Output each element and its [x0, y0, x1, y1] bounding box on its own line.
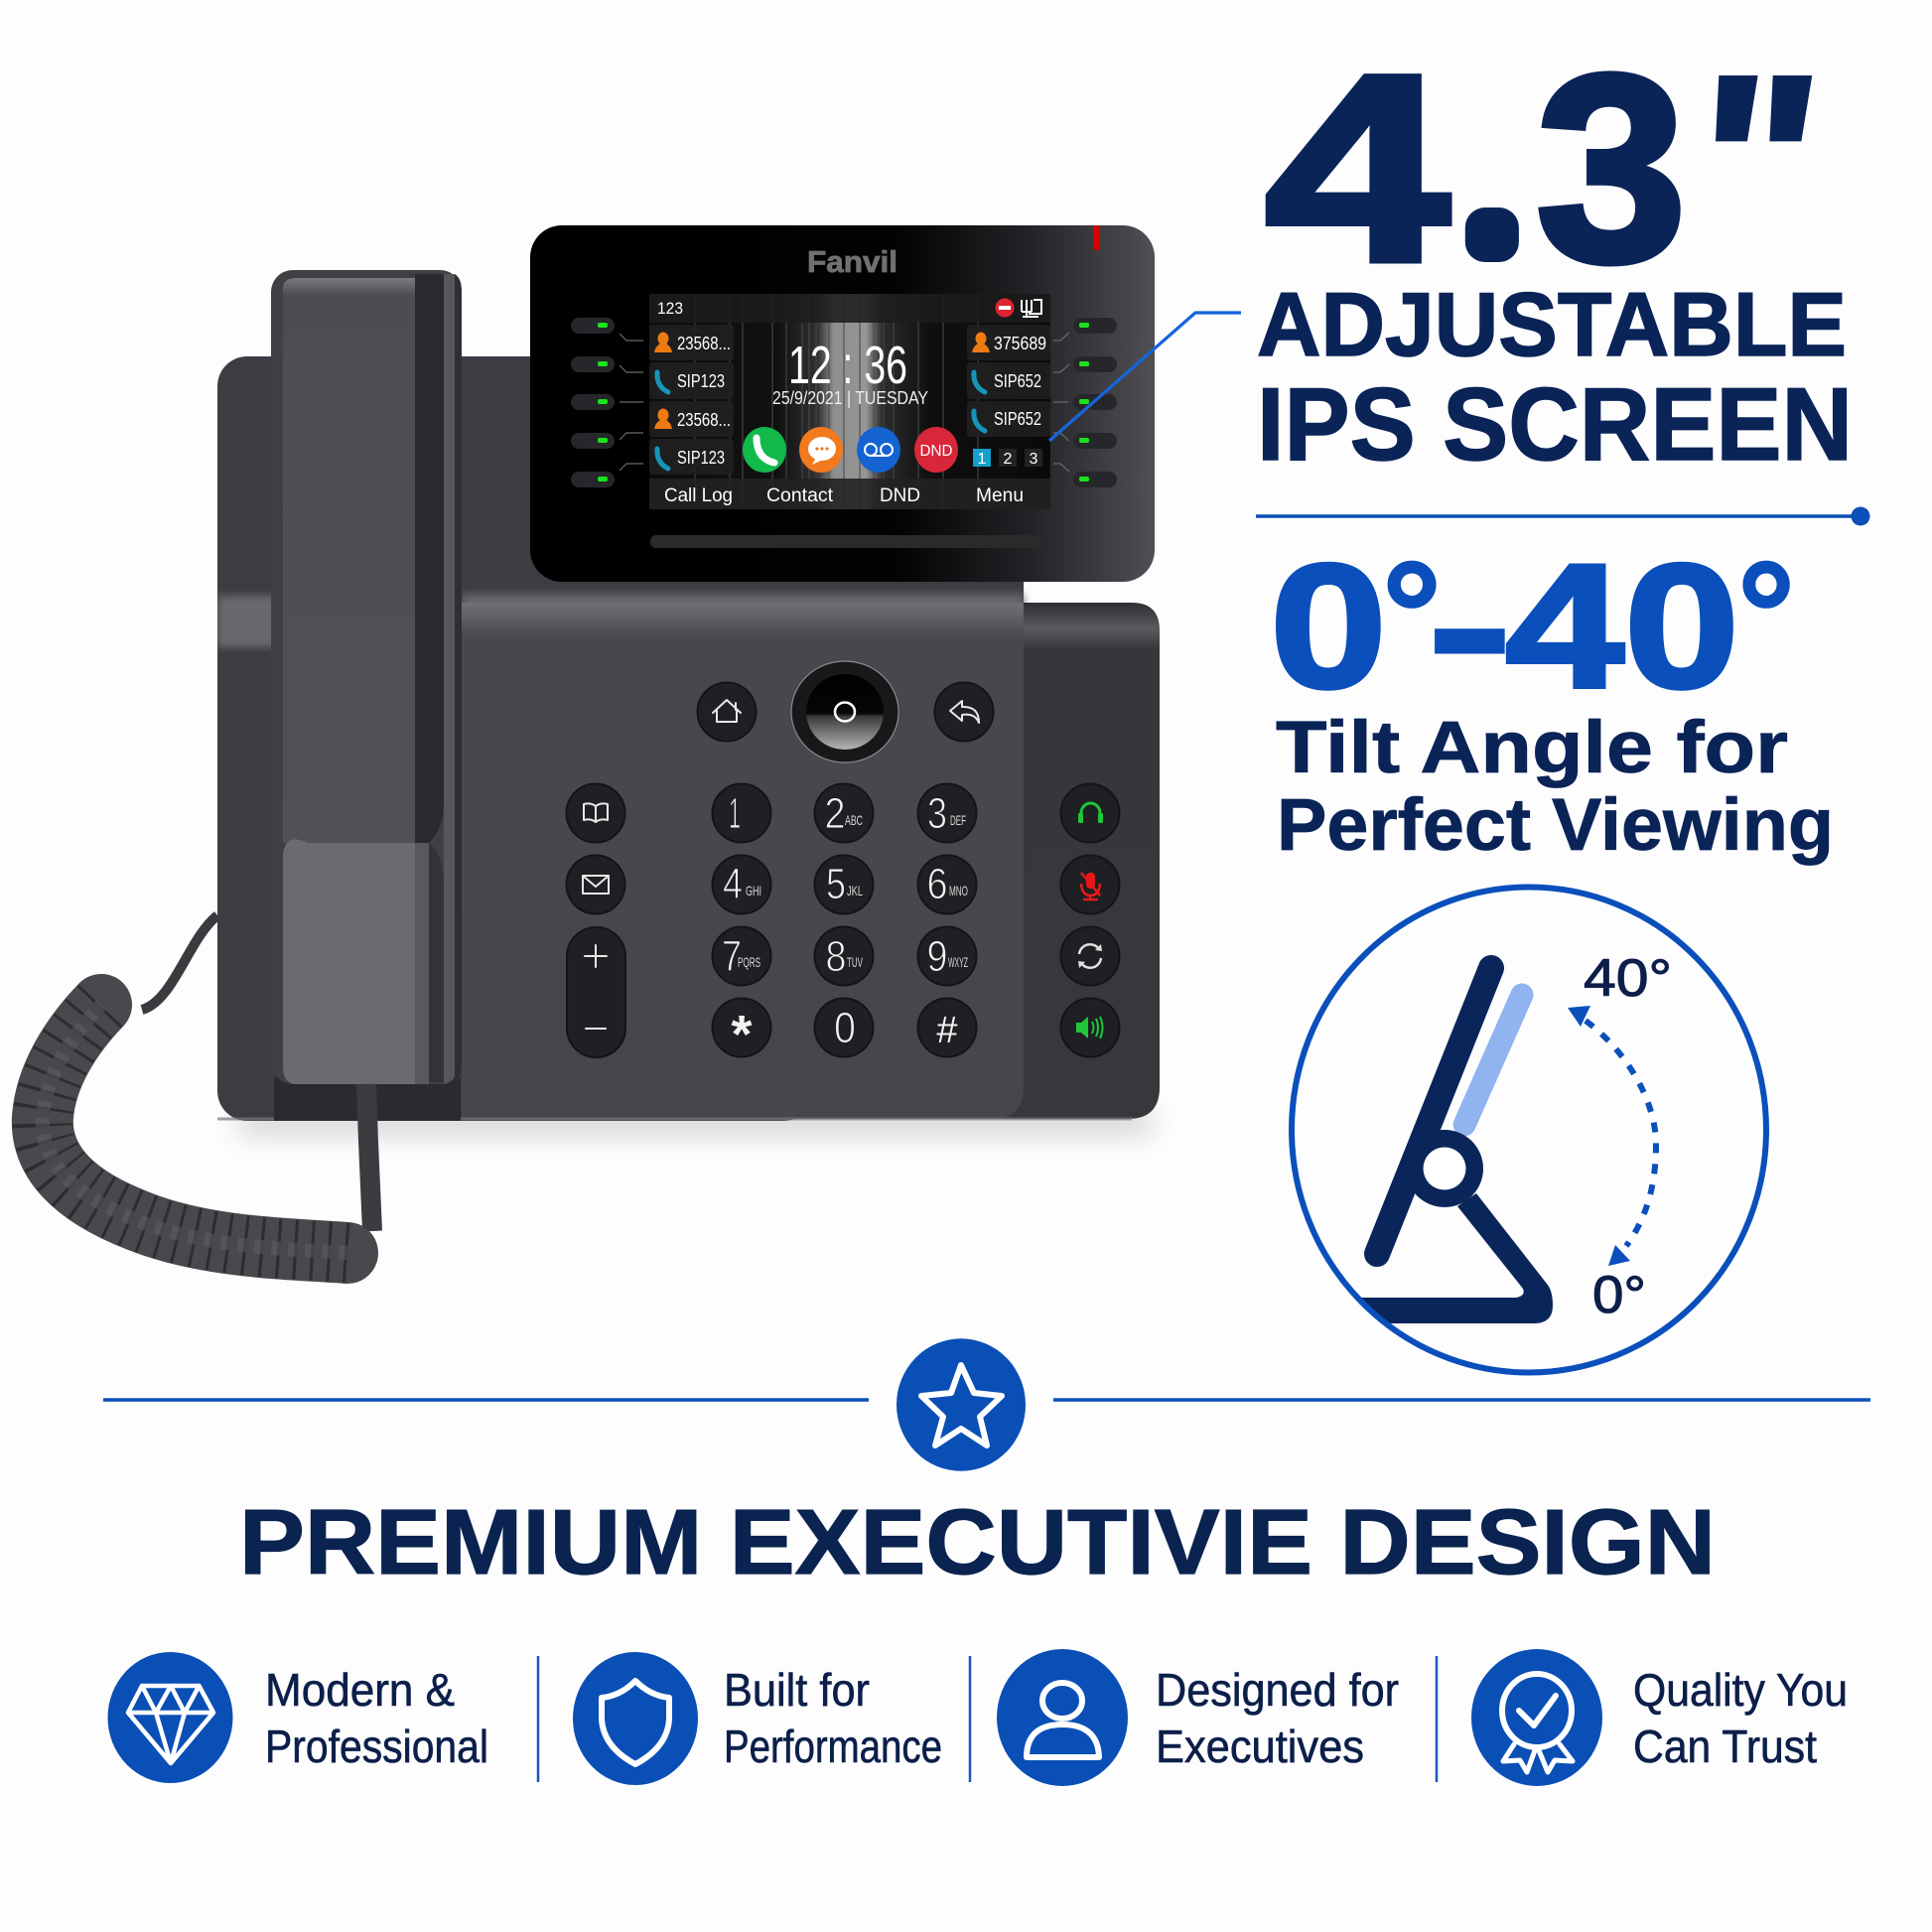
feature: designed for executives — [997, 1649, 1399, 1786]
joystick — [791, 661, 898, 762]
right contact keys: SIP652 — [994, 371, 1041, 391]
tilt caption: Tilt Angle for — [1276, 706, 1788, 788]
message key — [566, 856, 625, 913]
network status icon — [1022, 300, 1041, 318]
dial pad: 8 — [826, 932, 846, 981]
back key — [935, 683, 993, 741]
divider with dot — [1256, 506, 1870, 526]
tilted display unit — [530, 225, 1155, 582]
icon: star badge — [897, 1338, 1026, 1471]
outer ring — [1292, 888, 1766, 1372]
text — [1156, 1664, 1399, 1772]
section divider right — [1053, 1398, 1870, 1402]
text: Designed for — [1156, 1664, 1399, 1716]
dial pad: 9 — [927, 932, 947, 981]
handset cord — [366, 1084, 372, 1231]
hinge — [1406, 1130, 1483, 1207]
dial pad: # — [936, 1010, 958, 1051]
floor shadow — [238, 1110, 1152, 1134]
stand base — [1340, 1193, 1553, 1323]
dial pad: 3 — [927, 789, 947, 838]
headset key — [1060, 784, 1120, 842]
navigation keys — [697, 661, 993, 762]
transfer key — [1060, 927, 1120, 985]
tilt range value: ° — [1382, 530, 1442, 697]
text: Professional — [265, 1721, 488, 1772]
dial pad: TUV — [847, 954, 863, 970]
tilt range value: 0 — [1270, 527, 1387, 725]
arrowhead top — [1568, 1006, 1590, 1027]
section heading: PREMIUM EXECUTIVIE DESIGN — [239, 1490, 1716, 1593]
thin line cord to base — [142, 915, 217, 1010]
headline: adjustable: ADJUSTABLE — [1257, 275, 1847, 375]
headline: 4.3 inch: . — [1478, 153, 1506, 264]
page selector — [973, 449, 1042, 468]
text: Quality You — [1633, 1664, 1848, 1716]
tilt range value: 4 — [1505, 527, 1624, 725]
text: Executives — [1156, 1721, 1364, 1772]
left contact keys: SIP123 — [677, 448, 725, 468]
soft key bar: Contact — [766, 485, 834, 506]
handset — [271, 270, 462, 1084]
section divider left — [103, 1398, 869, 1402]
text — [1633, 1664, 1848, 1772]
app: voicemail — [857, 427, 900, 473]
soft key bar: Call Log — [664, 485, 733, 506]
date: 25/9/2021 | TUESDAY — [772, 388, 928, 408]
text: Performance — [724, 1721, 942, 1772]
home key — [697, 683, 757, 741]
dial pad: MNO — [949, 883, 968, 898]
tilt range value: ° — [1737, 530, 1795, 697]
icon: award ribbon — [1471, 1649, 1602, 1786]
left function keys — [566, 784, 625, 1057]
left contact keys: SIP123 — [677, 371, 725, 391]
icon: diamond — [107, 1652, 232, 1783]
app: DND — [914, 427, 958, 473]
phone base body — [217, 356, 1024, 1121]
page selector: 2 — [1004, 451, 1013, 468]
speaker key — [1060, 999, 1120, 1056]
text: Modern & — [265, 1664, 455, 1716]
label 0 degrees: 0° — [1592, 1266, 1646, 1324]
app: phone — [743, 427, 786, 473]
tilt caption: Perfect Viewing — [1277, 783, 1834, 866]
dashed motion arc — [1586, 1021, 1656, 1246]
right contact keys: SIP652 — [994, 409, 1041, 429]
dial pad: * — [731, 1005, 753, 1064]
dial pad: ABC — [845, 812, 863, 828]
dial pad: 1 — [729, 789, 741, 838]
headline: 4.3 inch: " — [1680, 25, 1833, 302]
brand logo: Fanvil — [807, 244, 897, 279]
arrowhead bottom — [1608, 1245, 1630, 1266]
tilted dark screen position — [1377, 968, 1491, 1254]
feature: quality you can trust — [1471, 1649, 1848, 1786]
handset cradle — [274, 1077, 461, 1121]
headline: 4.3 inch — [1265, 19, 1833, 317]
volume rocker — [567, 927, 625, 1057]
LCD screen: 123 — [657, 299, 683, 318]
dial pad: 6 — [927, 860, 947, 908]
mute key — [1060, 856, 1120, 913]
feature: modern and professional — [107, 1652, 488, 1783]
dial pad — [713, 784, 977, 1064]
icon: person — [997, 1649, 1128, 1786]
app: DND: DND — [919, 443, 953, 460]
text — [724, 1664, 942, 1772]
dial pad: WXYZ — [948, 954, 968, 970]
text: Can Trust — [1633, 1721, 1817, 1772]
status LED — [1093, 225, 1100, 250]
left line keys — [571, 318, 643, 487]
soft key bar: DND — [880, 485, 920, 506]
LCD screen — [649, 294, 1050, 509]
tilt range value: 0 — [1624, 527, 1739, 725]
leader line from screen to headline — [1049, 313, 1241, 441]
right side panel — [993, 603, 1160, 1119]
soft key bar: Menu — [976, 485, 1024, 506]
page selector: 3 — [1030, 451, 1038, 468]
right function keys — [1060, 784, 1120, 1056]
left contact keys: 23568... — [677, 410, 731, 430]
dial pad: 0 — [834, 1004, 856, 1052]
dial pad: PQRS — [738, 954, 760, 970]
headline: 4.3 inch: 3 — [1536, 19, 1687, 317]
soft key bar — [649, 479, 1050, 509]
dial pad: JKL — [847, 883, 863, 898]
dial pad: 7 — [722, 932, 742, 981]
left contact keys: 23568... — [677, 334, 731, 353]
tilt caption — [1276, 706, 1834, 866]
DND status icon — [995, 298, 1015, 318]
right contact keys: 375689 — [994, 334, 1046, 353]
page selector: 1 — [978, 451, 987, 468]
dial pad: 2 — [824, 789, 846, 838]
status bar — [649, 294, 1050, 323]
phonebook key — [566, 784, 625, 842]
dial pad: 4 — [723, 860, 743, 908]
headline: IPS screen: IPS SCREEN — [1257, 367, 1853, 483]
icon: shield — [573, 1652, 698, 1785]
right line keys — [1053, 318, 1117, 487]
dial pad: GHI — [746, 883, 761, 898]
feature: built for performance — [573, 1652, 942, 1785]
keypad plate — [462, 603, 1024, 1119]
display slot — [650, 535, 1044, 548]
dial pad: 5 — [826, 860, 846, 908]
tilt range value: - — [1428, 527, 1512, 725]
headline: 4.3 inch: 4 — [1265, 19, 1451, 317]
text — [265, 1664, 488, 1772]
text: Built for — [724, 1664, 870, 1716]
dial pad: DEF — [950, 812, 966, 828]
label 40 degrees: 40° — [1584, 949, 1672, 1008]
coiled cord — [43, 1005, 347, 1253]
tilt angle diagram — [1292, 888, 1766, 1372]
app: messages — [799, 427, 843, 473]
tilted light screen position — [1464, 995, 1522, 1125]
clock: 12 : 36 — [788, 336, 907, 395]
right contact keys — [967, 325, 1050, 437]
tilt range value — [1270, 527, 1795, 725]
left contact keys — [649, 325, 734, 475]
